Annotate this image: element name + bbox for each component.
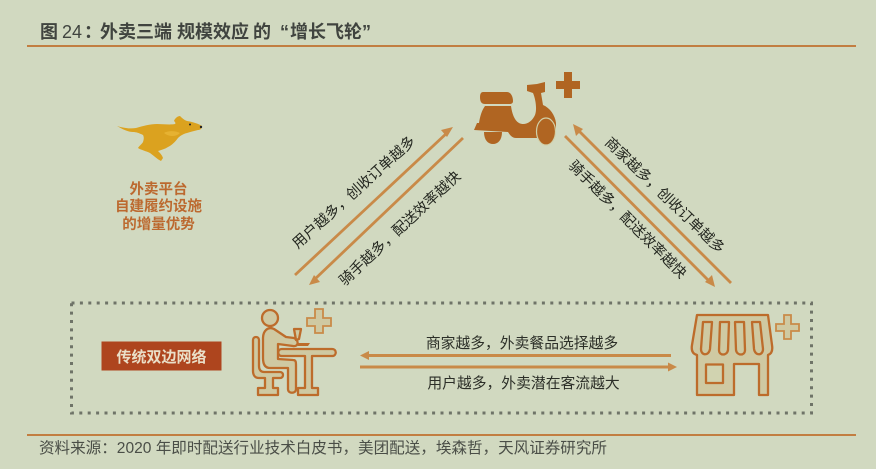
label: riders more, delivery faster (left): 骑手越多，配送效率越快 [336,168,465,289]
title: 外卖三端 [100,22,172,42]
icon: person plus [307,309,331,333]
icon: kangaroo [117,116,202,161]
arrow: merchants to users [360,351,671,360]
title: ” [362,22,371,42]
text: self-built fulfilment advantage [115,180,202,233]
arrow: users to merchants [360,362,677,372]
arrow: scooter to merchant [565,136,715,287]
title: 24 [62,22,82,42]
icon: scooter plus [556,72,580,98]
arrow: merchant to scooter [573,124,731,283]
icon: scooter [474,82,556,145]
title: 的 [253,22,271,42]
arrow: scooter to users [309,138,463,285]
text: self-built fulfilment advantage: 的增量优势 [122,215,195,233]
icon: storefront plus [776,315,799,339]
badge: traditional two-sided network: 传统双边网络 [116,348,207,366]
source note: 资料来源：2020 年即时配送行业技术白皮书，美团配送，埃森哲，天风证券研究所 [39,439,607,457]
text: self-built fulfilment advantage: 自建履约设施 [115,197,202,215]
label: merchants more, more food choice: 商家越多，外卖餐品选择越多 [426,335,618,352]
label: users more, more potential customers: 用户越多，外卖潜在客流越大 [427,375,620,392]
label: riders more, delivery faster (right): 骑手越多，配送效率越快 [565,157,690,282]
title: 图 [40,22,58,42]
badge: traditional two-sided network [102,342,222,370]
label: users more, orders more: 用户越多，创收订单越多 [289,133,419,252]
title: ： [84,22,102,42]
icon: person at table [253,310,336,395]
label: merchants more, orders more: 商家越多，创收订单越多 [601,134,728,257]
panel: traditional two-sided network [72,303,812,413]
arrow: users to scooter [295,127,453,275]
title: 增长飞轮 [290,22,362,42]
title: “ [280,22,289,42]
icon: storefront [692,315,772,395]
text: self-built fulfilment advantage: 外卖平台 [130,180,188,198]
title: 规模效应 [177,21,249,42]
